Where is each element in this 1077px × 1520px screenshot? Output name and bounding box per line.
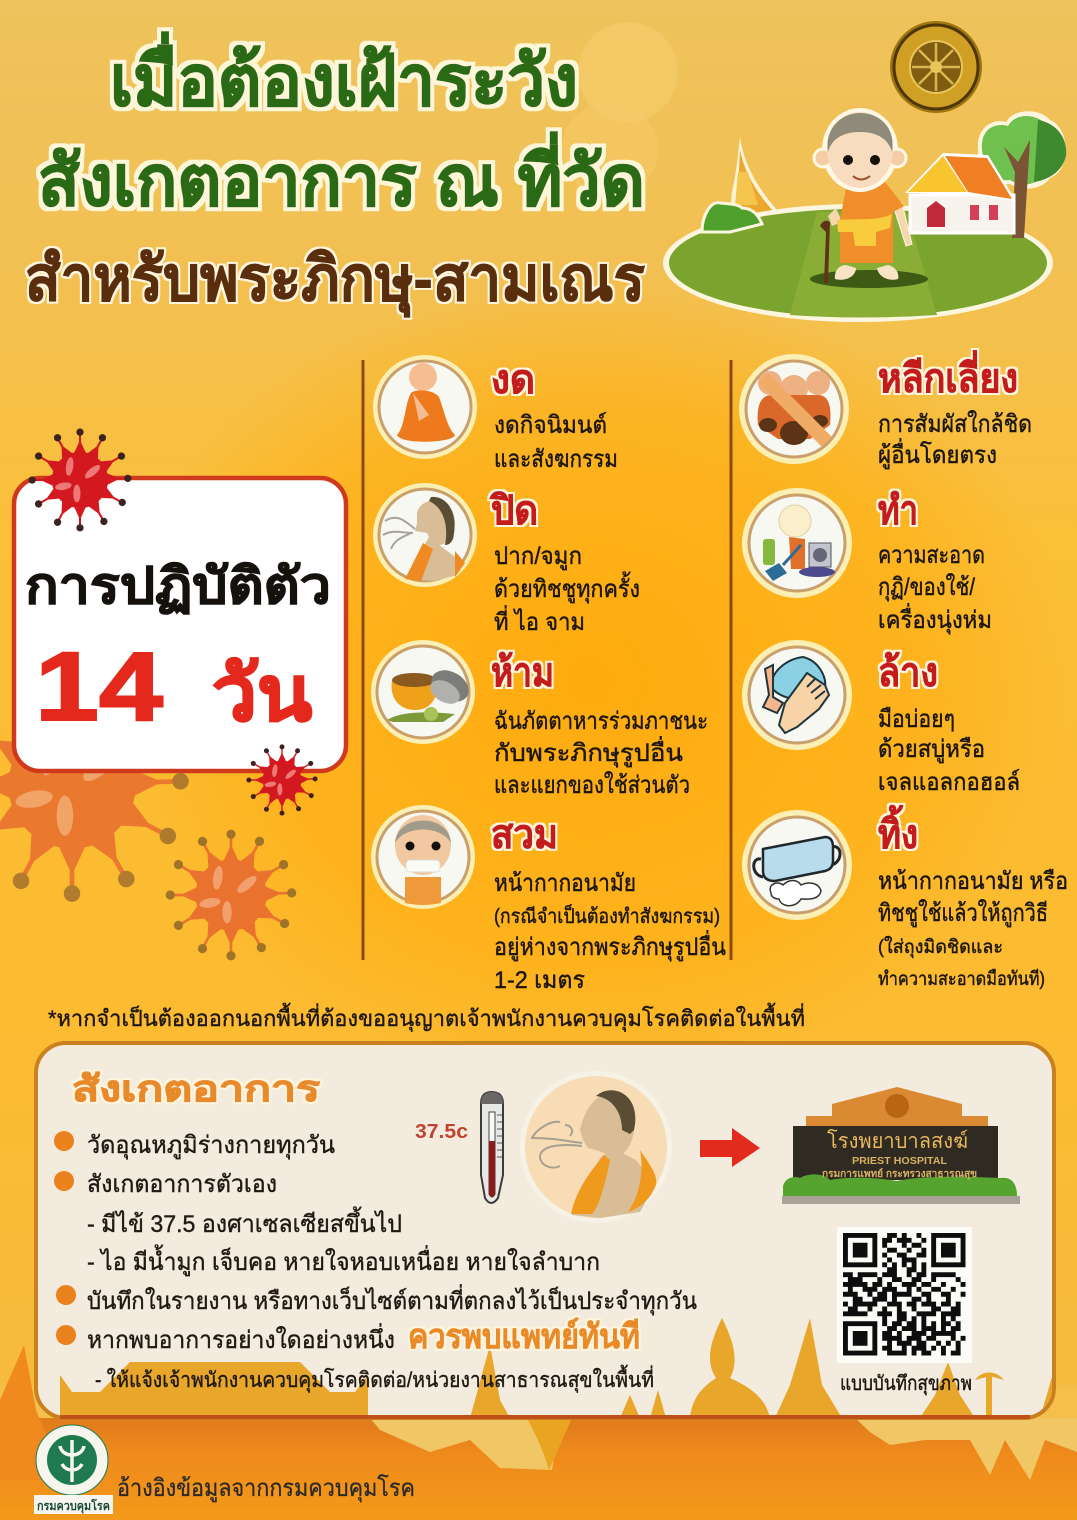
description: ทิชชูใช้แล้วให้ถูกวิธี [878,899,1048,928]
description: อยู่ห่างจากพระภิกษุรูปอื่น [494,930,726,962]
description: ความสะอาด [878,542,985,569]
QR code [837,1227,972,1363]
shadow [810,270,928,288]
icon: priest hospital sign: กรมการแพทย์ กระทรวงสาธารณสุข [822,1168,977,1180]
heading: ล้าง [878,651,938,695]
symptom checklist [87,1132,697,1393]
QR caption: แบบบันทึกสุขภาพ [840,1373,972,1396]
heading: ปิด [490,489,538,533]
description: ที่ ไอ จาม [494,605,585,636]
icon: priest hospital sign [782,1087,1020,1204]
symptom checklist: - มีไข้ 37.5 องศาเซลเซียสขึ้นไป [87,1206,402,1238]
logo: ministry of public health [34,1425,113,1514]
ground [663,204,1053,322]
title [25,31,645,317]
item: clean [742,488,992,635]
item: abstain [373,355,618,473]
description: หน้ากากอนามัย [494,870,636,897]
title line 1: เมื่อต้องเฝ้าระวัง [110,31,578,120]
item: wash [742,640,1020,796]
description: กุฏิ/ของใช้/ [878,573,975,602]
virus: orange lower [166,830,297,960]
description: และสังฆกรรม [494,446,618,473]
bullets [54,1131,76,1345]
panel: 14 days [14,478,346,771]
icon: washing hands [742,640,852,750]
heading: practice: การปฏิบัติตัว [25,558,331,614]
description: ทำความสะอาดมือทันที) [878,968,1045,990]
title line 2: สังเกตอาการ ณ ที่วัด [38,131,645,220]
description [494,708,708,799]
symptom checklist: สังเกตอาการตัวเอง [87,1171,277,1198]
monk [814,108,912,283]
description: (ใส่ถุงมิดชิดและ [878,936,1003,959]
hospital name: โรงพยาบาลสงฆ์ [827,1129,968,1153]
description: กับพระภิกษุรูปอื่น [494,736,683,768]
description: การสัมผัสใกล้ชิด [878,410,1032,438]
illustration: monk at temple [663,108,1066,322]
arrow [700,1128,760,1167]
bush [702,203,762,232]
symptom checklist: วัดอุณหภูมิร่างกายทุกวัน [87,1132,335,1160]
description: และแยกของใช้ส่วนตัว [494,771,690,799]
heading: ทิ้ง [878,805,918,857]
icon: monk with mask [371,805,475,909]
heading: สวม [491,813,558,857]
description: งดกิจนิมนต์ [494,411,607,439]
description [494,870,726,994]
description [878,410,1032,470]
stupa [728,137,785,232]
description: เครื่องนุ่งห่ม [878,603,992,635]
symptom checklist: - ไอ มีน้ำมูก เจ็บคอ หายใจหอบเหนื่อย หายใจลำบาก [87,1244,600,1277]
item: cover [373,483,640,636]
icon: meditating monk [373,355,477,459]
logo: ministry of public health: กรมควบคุมโรค [37,1498,110,1514]
description: (กรณีจำเป็นต้องทำสังฆกรรม) [494,903,720,928]
symptom checklist: บันทึกในรายงาน หรือทางเว็บไซต์ตามที่ตกลงไว้เป็นประจำทุกวัน [87,1284,697,1316]
footer skyline [0,1345,1077,1520]
icon: alms bowl and food [371,640,475,744]
icon: novice cleaning [742,488,852,598]
item: discard [742,805,1068,990]
temple [905,153,1016,233]
heading: สังเกตอาการ [72,1068,321,1109]
description: ฉันภัตตาหารร่วมภาชนะ [494,708,708,735]
heading: ทำ [878,489,918,533]
icon: monks crossed out [739,354,849,464]
item: avoid [739,350,1032,470]
icon: monk coughing [373,483,477,587]
virus: red top [29,429,132,531]
description [878,542,992,635]
description [494,543,640,636]
virus: red small [246,744,318,816]
description: มือบ่อยๆ [878,706,955,733]
icon: priest hospital sign: PRIEST HOSPITAL [852,1156,947,1167]
panel: observe symptoms [36,1043,1060,1418]
symptom checklist: หากพบอาการอย่างใดอย่างหนึ่ง [87,1323,395,1354]
source credit: อ้างอิงข้อมูลจากกรมควบคุมโรค [117,1474,415,1503]
heading: งด [491,358,535,402]
description [494,411,618,473]
heading: หลีกเลี่ยง [878,350,1018,401]
symptom checklist: ควรพบแพทย์ทันที [408,1317,640,1356]
description: 1-2 เมตร [494,967,585,994]
description: ด้วยทิชชูทุกครั้ง [494,571,640,604]
description [878,868,1068,990]
icon: thermometer [481,1092,503,1203]
icon: used mask and tissue [742,810,852,920]
unit: days: วัน [212,652,312,737]
title line 3: สำหรับพระภิกษุ-สามเณร [25,245,645,317]
symptom checklist: - ให้แจ้งเจ้าพนักงานควบคุมโรคติดต่อ/หน่วยงานสาธารณสุขในพื้นที่ [95,1365,654,1393]
item: forbid [371,640,708,799]
temperature label: 37.5c [415,1121,468,1143]
number 14: 14 [35,632,163,741]
description [878,706,1020,796]
bottom border [60,1415,1030,1419]
item: wear mask [371,805,726,994]
footnote: *หากจำเป็นต้องออกนอกพื้นที่ต้องขออนุญาตเจ้าพนักงานควบคุมโรคติดต่อในพื้นที่ [48,1003,805,1032]
description: เจลแอลกอฮอล์ [878,768,1020,796]
virus: large faded left [0,668,189,902]
icon: hospital seal [890,21,982,113]
description: ผู้อื่นโดยตรง [878,438,997,470]
divider lines [363,360,731,960]
icon: monk with fever [520,1071,672,1223]
heading: ห้าม [491,651,554,695]
temple skyline silhouette [60,1318,1060,1418]
tree [978,111,1066,238]
description: ด้วยสบู่หรือ [878,736,985,764]
description: ปาก/จมูก [494,543,582,571]
